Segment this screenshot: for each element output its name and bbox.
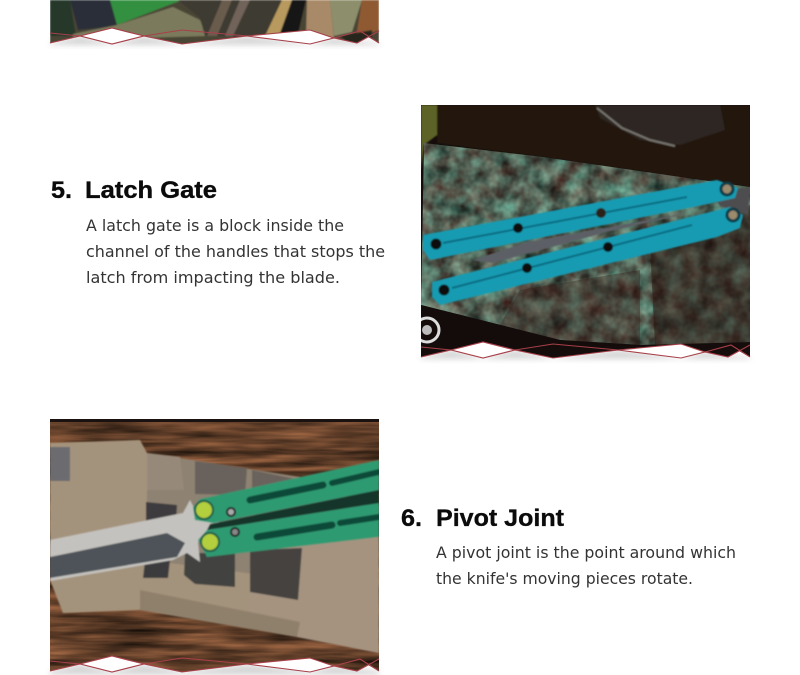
section 5: Latch Gate text xyxy=(51,177,385,287)
torn edge: photo 1 xyxy=(50,28,379,44)
upper handle xyxy=(193,460,379,523)
lower handle xyxy=(432,207,743,305)
torn edge: photo 2 xyxy=(421,342,750,358)
body text: latch gate description xyxy=(86,216,385,287)
section 6: Pivot Joint text xyxy=(401,505,736,588)
body text: pivot joint description: the knife's moving pieces rotate. xyxy=(436,569,693,588)
upper handle xyxy=(423,180,738,260)
heading: 5. Latch Gate: Latch Gate xyxy=(85,177,217,204)
blade xyxy=(474,215,676,263)
heading: 6. Pivot Joint: 6. xyxy=(401,505,422,532)
lower handle xyxy=(198,503,379,557)
body text: latch gate description: channel of the handles that stops the xyxy=(86,242,385,261)
body text: latch gate description: A latch gate is a block inside the xyxy=(86,216,344,235)
rusted plate xyxy=(421,143,750,345)
torn edge: photo 3 xyxy=(50,656,379,672)
pivots xyxy=(195,501,213,519)
photo: camouflage gear with torn edge xyxy=(50,0,379,46)
body text: pivot joint description: A pivot joint is the point around which xyxy=(436,543,736,562)
magazine xyxy=(50,439,251,614)
heading: 5. Latch Gate: 5. xyxy=(51,177,72,204)
icon: round logo xyxy=(415,318,439,342)
photo: green butterfly knife on tan magazine xyxy=(50,419,379,675)
body text: pivot joint description xyxy=(436,543,736,588)
heading: 6. Pivot Joint: Pivot Joint xyxy=(436,505,564,532)
photo: teal butterfly knife on rusted plate xyxy=(415,105,750,360)
wood background xyxy=(50,419,379,675)
blade xyxy=(50,500,227,581)
body text: latch gate description: latch from impacting the blade. xyxy=(86,268,340,287)
